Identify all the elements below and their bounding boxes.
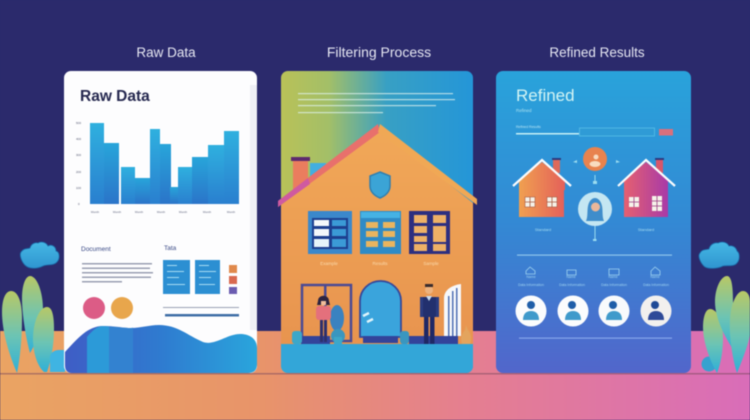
icon: orange circle [111, 297, 133, 319]
text block: Document: Document [81, 246, 111, 253]
bottom divider [519, 338, 672, 339]
panel: Filtering Process [278, 71, 477, 373]
right plants and cloud [699, 242, 750, 373]
bar chart: Month [113, 210, 121, 214]
bar chart: Month [179, 210, 187, 214]
window labels: Sample [423, 261, 439, 266]
progress line [163, 307, 239, 316]
feature labels: Name [608, 275, 618, 279]
subtitle: Refined [516, 108, 532, 113]
house labels: Standard [535, 227, 551, 232]
panel title: Raw Data [80, 88, 150, 105]
legend swatches [229, 265, 237, 294]
feature labels: Data Information [518, 283, 544, 287]
heading: Refined Results: Refined Results [549, 45, 645, 60]
bar chart: Month [135, 210, 143, 214]
heading: Raw Data: Raw Data [136, 45, 196, 60]
feature labels: Data Information [643, 283, 669, 287]
icon: person circle [578, 192, 612, 226]
avatar 2 [558, 296, 588, 326]
window labels: Example [320, 261, 338, 266]
white gate [444, 284, 461, 336]
shield window [370, 172, 390, 198]
base steps [292, 329, 458, 345]
icon: pink circle [83, 297, 105, 319]
text block: intro lines [298, 93, 455, 113]
top divider [517, 254, 672, 256]
potted plant [461, 325, 471, 344]
person: woman [316, 296, 331, 342]
avatar 1 [516, 296, 546, 326]
bar chart: 300 [76, 153, 81, 157]
base platform [281, 344, 473, 373]
feature labels: Name [566, 275, 576, 279]
bar chart: Month [203, 210, 211, 214]
feature labels [518, 275, 669, 287]
house labels [535, 227, 654, 232]
search bar: Refined Results [516, 125, 541, 129]
feature labels: Name [526, 275, 536, 279]
text block: Document [81, 246, 153, 282]
window labels: Results [372, 261, 388, 266]
bar chart: Month [227, 210, 235, 214]
left house [513, 158, 571, 217]
icon: house [278, 124, 477, 345]
chimney [291, 157, 326, 190]
feature labels: Data Information [601, 283, 627, 287]
wave [65, 325, 257, 373]
right house [618, 158, 675, 217]
icon: orange circle [583, 147, 607, 171]
left plants and cloud [2, 242, 65, 373]
window 1 [308, 211, 352, 254]
bar chart: 100 [76, 186, 81, 190]
connector arrows [573, 160, 620, 241]
text block: Tata: Tata [164, 245, 177, 252]
arched door [360, 281, 401, 343]
bar chart: Month [157, 210, 165, 214]
bar chart: 500 [76, 121, 81, 125]
bar chart [76, 121, 239, 214]
search bar [516, 125, 673, 136]
roof [278, 124, 477, 207]
person: man [420, 284, 439, 344]
panel: Refined Results [496, 71, 691, 373]
window labels [320, 261, 439, 266]
table cards [163, 260, 220, 294]
panel title: Refined [516, 86, 575, 105]
feature labels: Data Information [559, 283, 585, 287]
window 2 [360, 211, 401, 254]
window 3 [409, 211, 450, 254]
heading: Filtering Process: Filtering Process [327, 44, 431, 60]
bar chart: 0 [78, 202, 80, 206]
wall [281, 130, 473, 345]
left double door [302, 285, 351, 341]
avatar 4 [640, 296, 672, 326]
feature labels: Name [650, 275, 660, 279]
avatar 3 [598, 296, 630, 326]
bar chart: 200 [76, 170, 81, 174]
house labels: Standard [638, 227, 654, 232]
bar chart: Month [91, 210, 99, 214]
panel: Raw Data [64, 71, 257, 373]
feature icons row [526, 267, 660, 275]
bar chart: 400 [76, 137, 81, 141]
